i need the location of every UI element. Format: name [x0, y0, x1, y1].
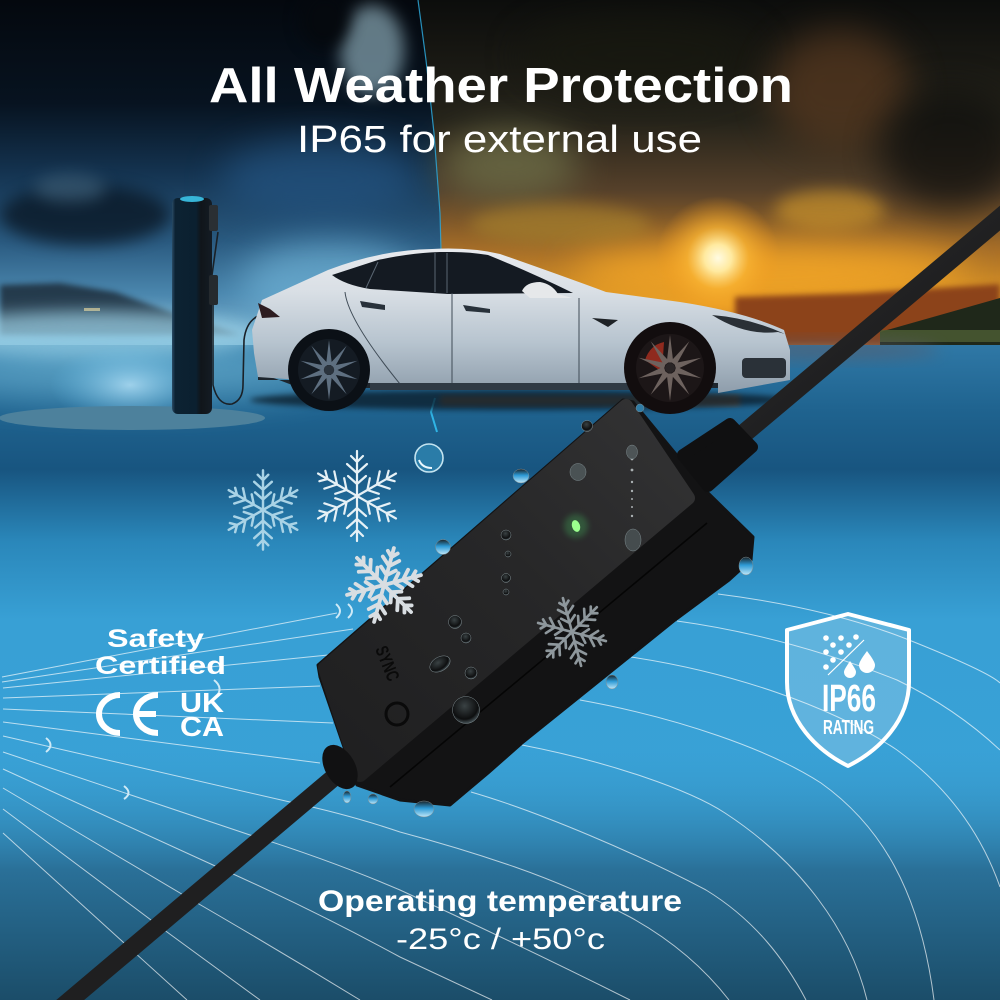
- upper cable gland: [683, 424, 752, 486]
- wind lines: [2, 594, 1000, 1000]
- brand logo: SYNC: [371, 643, 403, 684]
- lower darkening gradient: [0, 740, 1000, 1000]
- shield: [787, 614, 909, 766]
- IP66 shield badge: [787, 614, 909, 766]
- lightning divide: [418, 0, 441, 250]
- rear wheel: [288, 329, 370, 411]
- device top face: [325, 406, 688, 775]
- water droplets: [343, 404, 753, 817]
- distant hill and lit house: [0, 283, 240, 335]
- operating temperature heading: Operating temperature: [318, 885, 682, 918]
- car body: [252, 249, 790, 393]
- rating label: RATING: [823, 717, 874, 739]
- device body: [318, 400, 753, 805]
- headlight: [712, 315, 785, 334]
- car windows: [332, 252, 573, 294]
- sun: [656, 196, 780, 320]
- wind chevrons: [46, 604, 352, 799]
- title: All Weather Protection: [209, 59, 793, 113]
- lower power cable: [56, 768, 345, 1000]
- temperature range: -25°c / +50°c: [396, 923, 605, 956]
- lightning reflection: [431, 398, 437, 432]
- floating water bubble: [415, 444, 443, 472]
- door handles and mirror: [360, 282, 618, 327]
- sunset haze on right horizon: [720, 341, 940, 359]
- door seams: [345, 292, 579, 384]
- upper power cable: [735, 208, 1000, 441]
- snowflake: large white: [313, 451, 401, 541]
- lower cable gland: [315, 739, 365, 795]
- left mist on water: [0, 311, 340, 400]
- snowflake: on device edge: [338, 538, 430, 632]
- background: split stormy and sunset sky: [0, 0, 1000, 345]
- dust and water icon: [823, 634, 875, 678]
- snowflake: pale blue: [224, 470, 302, 550]
- indicator dots: [631, 458, 633, 517]
- certified heading: Certified: [95, 652, 226, 680]
- sill: [370, 383, 630, 390]
- EV charger device: [315, 400, 753, 817]
- car underbody: [258, 372, 720, 388]
- IP66 label: IP66: [822, 678, 876, 720]
- tail light: [258, 303, 280, 318]
- brand logo: [371, 643, 408, 725]
- subtitle: IP65 for external use: [297, 119, 702, 161]
- CA mark: CA: [180, 711, 224, 742]
- CE mark: [99, 695, 158, 733]
- charging post: [0, 196, 265, 430]
- snowflake: on device face: [530, 589, 614, 675]
- front wheel: [624, 322, 716, 414]
- window pillars: [366, 253, 447, 293]
- front grille: [742, 358, 786, 378]
- seam: [390, 523, 707, 787]
- sunset treeline: [735, 284, 1000, 345]
- UK mark: UK: [180, 687, 224, 718]
- safety heading: Safety: [107, 625, 204, 653]
- status led: [564, 514, 588, 538]
- safety certified badge: [95, 625, 226, 742]
- electric car: [250, 249, 790, 414]
- orange ground reflection: [440, 396, 740, 405]
- water surface: [0, 345, 1000, 1000]
